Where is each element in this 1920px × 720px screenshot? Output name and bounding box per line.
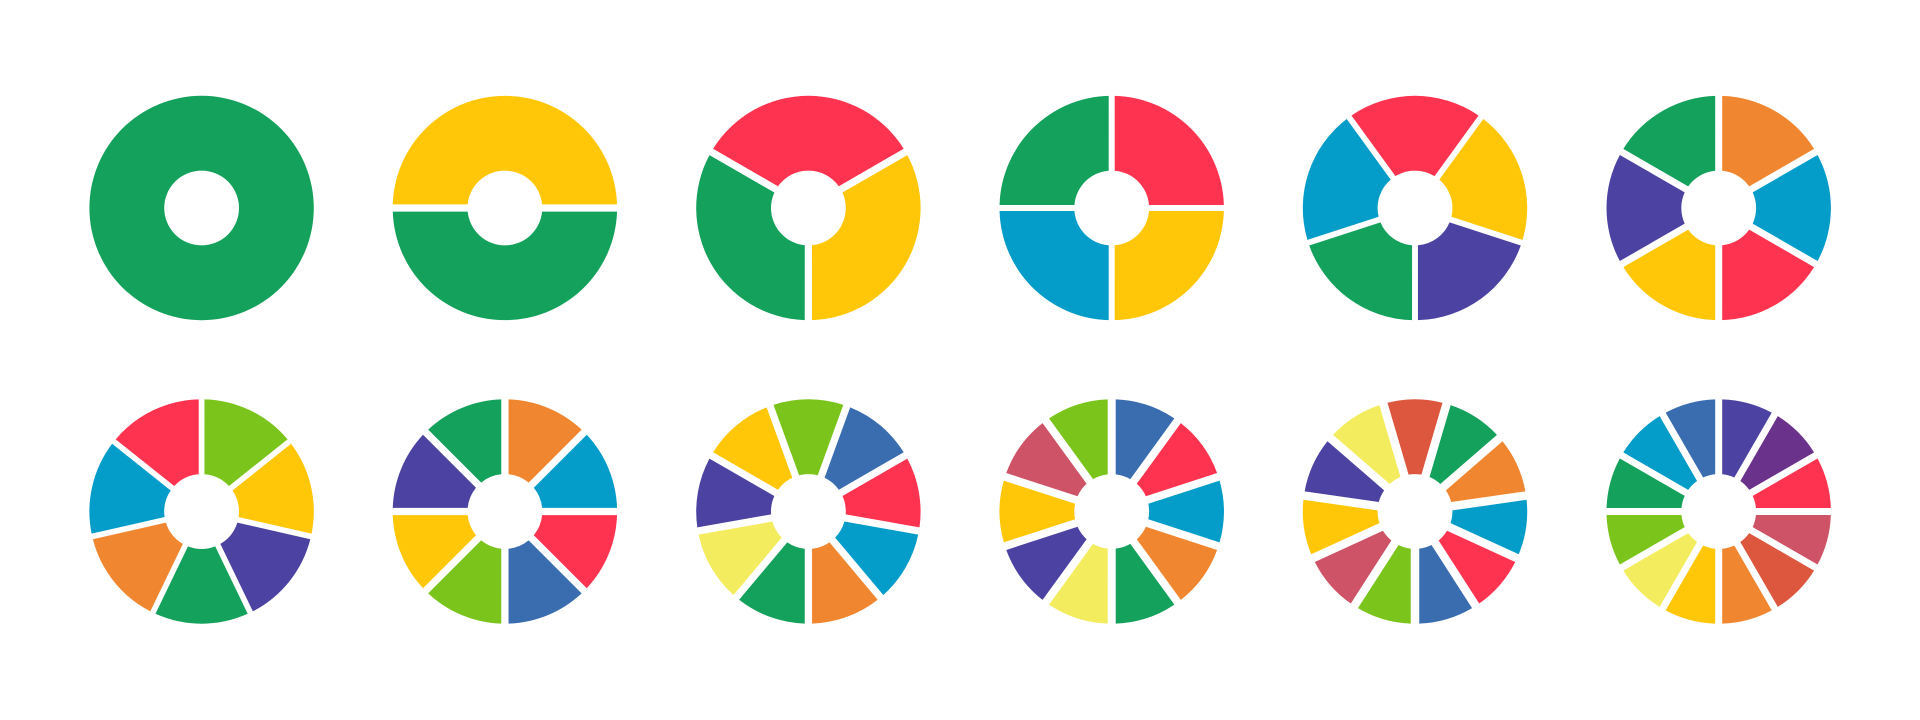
donut: 1 segment [89,96,314,320]
segment: lime [175,390,292,500]
segment: yellow [710,403,812,506]
segment: red [1077,74,1246,242]
segment: vermilion [1387,399,1443,475]
segment: red [111,390,228,500]
segment: steel blue [805,403,907,506]
segment: indigo [1382,196,1532,336]
donut: 9 segments [692,399,925,629]
segment: lime [1604,496,1690,565]
segment: green [1298,196,1448,336]
segment: lime [1357,539,1431,627]
segment: blue [1148,481,1224,542]
segment: yellow [386,489,487,591]
segment: pale yellow [1048,537,1130,628]
segment: indigo [1607,155,1685,261]
donut: 6 segments [1607,84,1831,332]
segment: yellow [1077,174,1246,342]
segment: indigo [1302,440,1393,521]
segment: orange [788,534,880,629]
segment: blue [978,174,1146,342]
segment: yellow [1665,540,1734,627]
segment: green [978,74,1146,242]
segment: vermilion [1727,519,1816,609]
segment: red [1351,96,1479,176]
segment: steel blue [1094,395,1176,486]
segment: rose [1003,421,1100,515]
segment: purple [1727,414,1816,504]
donut: 12 segments [1604,396,1834,627]
segment: green [1604,458,1690,527]
segment: indigo [386,432,487,534]
donut: 10 segments [999,395,1224,628]
segment: steel blue [482,529,584,630]
segment: steel blue [1399,539,1473,627]
segment: green [737,534,829,629]
segment: blue [1621,414,1711,504]
segment: blue [1448,490,1530,555]
segment: rose [1312,515,1405,606]
segment: blue [1753,155,1831,261]
segment: blue [82,442,178,549]
segment: pale yellow [694,499,794,598]
segment: green [1412,402,1499,495]
segment: yellow [393,96,617,204]
segment: indigo [1703,396,1773,483]
segment: yellow [225,442,321,549]
segment: orange [482,393,584,494]
segment: lime [425,529,528,630]
segment: lime [773,399,843,475]
segment: red [713,96,904,186]
segment: pale yellow [1621,519,1711,609]
segment: yellow [780,136,953,347]
segment: blue [822,499,923,598]
donut: 2 segments [393,96,617,320]
segment: orange [1123,508,1221,602]
segment: orange [1703,540,1773,627]
segment: indigo [692,458,779,540]
segment: indigo [1003,508,1100,602]
segment: red [838,458,925,540]
segment: yellow [1426,113,1541,259]
segment: red [1425,515,1518,606]
segment: yellow [1300,490,1382,555]
segment: orange [1437,440,1528,521]
donut: 3 segments [664,96,953,347]
donut: 5 segments [1289,96,1541,336]
donut: 4 segments [978,74,1246,342]
segment: green [1094,537,1176,628]
donut: 11 segments [1300,399,1530,627]
segment: pale yellow [1331,402,1418,495]
donut: 8 segments [386,393,624,630]
segment: green [1617,84,1748,205]
segment: indigo [200,497,318,617]
segment: red [523,489,624,591]
segment: orange [1690,84,1821,205]
segment: green [425,393,528,494]
segment: green [156,546,248,624]
segment: yellow [1617,211,1748,332]
segment: blue [1289,113,1404,259]
segment: orange [85,497,203,617]
segment: red [1690,211,1821,332]
segment: blue [523,432,624,534]
segment: lime [1048,395,1130,486]
segment: green [664,136,837,347]
segment: green [393,212,617,320]
donut: 7 segments [82,390,321,624]
segment: red [1748,458,1834,527]
segment: yellow [999,481,1075,542]
segment: rose [1748,496,1834,565]
segment: steel blue [1665,396,1734,483]
segment: red [1123,421,1221,515]
